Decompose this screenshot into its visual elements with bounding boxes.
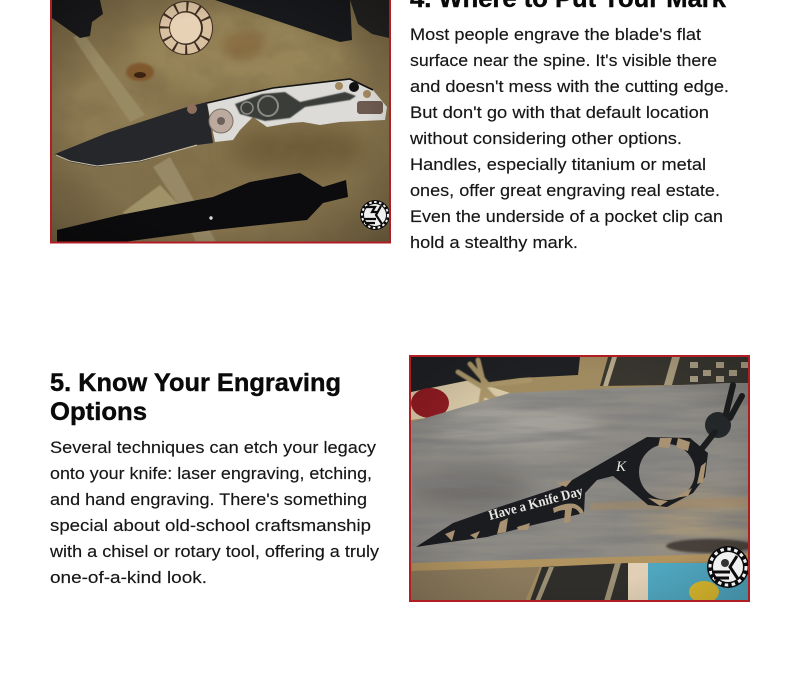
skeleton knife: K [615, 459, 627, 475]
text block: section 4 body: ones, offer great engraving real estate. [410, 181, 720, 200]
handle [207, 79, 387, 142]
text block: section 5 body: with a chisel or rotary tool, offering a truly [49, 542, 380, 561]
top dark gear [52, 0, 103, 38]
wood plank [412, 383, 748, 563]
text block: section 5 body: Several techniques can etch your legacy [50, 438, 377, 457]
text block: section 4 body: Even the underside of a pocket clip can [410, 207, 723, 226]
photo: skeleton knife on wood [410, 356, 760, 603]
text block: section 5 body: onto your knife: laser engraving, etching, [50, 464, 372, 483]
bottom cloth [411, 567, 540, 601]
icon: brand badge [707, 546, 749, 588]
icon: brand badge [360, 200, 390, 230]
fabric strap [73, 33, 145, 122]
bolt carrier [57, 173, 348, 242]
infographic page [50, 0, 750, 602]
photo: engraved folding knife [50, 0, 390, 242]
knife camouflage marks [445, 438, 706, 541]
top dark case [411, 357, 580, 395]
text block: section 5 body: and hand engraving. There's something [50, 490, 367, 509]
text block: section 5 body: one-of-a-kind look. [50, 568, 207, 587]
paracord knot [700, 385, 742, 451]
text block: section 4 body: hold a stealthy mark. [410, 233, 578, 252]
rope tassel [458, 360, 530, 408]
skeleton knife [416, 437, 708, 547]
blade [55, 102, 213, 167]
text block: section 4 body: and doesn't mess with the cutting edge. [410, 77, 729, 96]
text block: section 5 body [49, 438, 380, 587]
text block: section 5 body: special about old-school craftsmanship [50, 516, 371, 535]
knife engraving: Have a Knife Day [487, 484, 585, 524]
fabric stain [126, 63, 154, 81]
plank lower edge [412, 553, 748, 571]
text block: section 4 body: surface near the spine. It's visible there [410, 51, 717, 70]
blue card [648, 563, 748, 601]
text block: section 4 body: But don't go with that default location [410, 103, 709, 122]
heading: section 5: 5. Know Your Engraving [50, 369, 341, 397]
text block: section 4 body [409, 25, 729, 252]
red emblem on cloth [411, 380, 510, 420]
top striped cloth [600, 357, 748, 386]
text block: section 4 body: without considering other options. [409, 129, 682, 148]
heading: section 5: Options [50, 398, 147, 426]
round coin [159, 1, 213, 55]
text block: section 4 body: Most people engrave the blade's flat [410, 25, 701, 44]
text block: section 4 body: Handles, especially titanium or metal [410, 155, 706, 174]
heading: section 5 [50, 369, 341, 426]
